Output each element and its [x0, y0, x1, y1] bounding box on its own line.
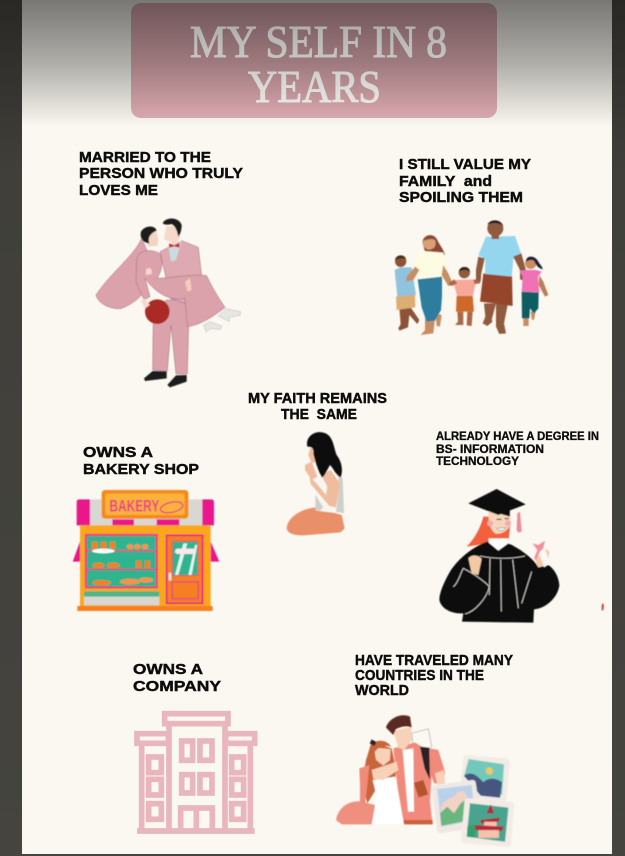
- heading: faith: THE SAME: [281, 406, 357, 423]
- heading: company: [133, 661, 221, 695]
- mother: [406, 235, 453, 335]
- heading: travel: COUNTRIES IN THE: [355, 667, 484, 684]
- illustration: family walking: [395, 220, 548, 335]
- boy: [395, 255, 419, 331]
- door: [167, 535, 203, 603]
- heading: travel: HAVE TRAVELED MANY: [355, 652, 513, 669]
- heading: degree: ALREADY HAVE A DEGREE IN: [436, 431, 599, 443]
- heading: bakery: BAKERY SHOP: [83, 461, 199, 478]
- illustration: bakery shop: [73, 490, 219, 611]
- heading: married: MARRIED TO THE: [79, 149, 211, 166]
- illustration: traveling couple and photos: [336, 715, 514, 847]
- heading: faith: MY FAITH REMAINS: [248, 390, 387, 407]
- awning: [73, 499, 219, 562]
- heading: family: I STILL VALUE MY: [399, 156, 531, 173]
- title banner: YEARS: [248, 61, 381, 112]
- illustration: bride and groom: [96, 219, 241, 387]
- heading: married: [79, 149, 243, 199]
- illustration: graduate: [439, 489, 604, 623]
- heading: degree: TECHNOLOGY: [436, 456, 519, 468]
- planter: [84, 591, 159, 605]
- heading: family: [399, 156, 531, 206]
- window: [86, 535, 157, 587]
- man: [386, 715, 445, 824]
- toddler: [448, 267, 481, 326]
- heading: married: LOVES ME: [79, 182, 158, 199]
- icon: company building: [137, 714, 255, 832]
- title banner: [22, 0, 612, 127]
- heading: bakery: [83, 444, 199, 478]
- heading: degree: BS- INFORMATION: [436, 444, 544, 456]
- photo: lake and sun: [460, 755, 510, 802]
- title banner: MY SELF IN 8: [190, 16, 447, 67]
- heading: family: SPOILING THEM: [399, 189, 523, 206]
- heading: degree: [436, 431, 599, 468]
- illustration: woman praying: [287, 432, 345, 535]
- heading: company: OWNS A: [133, 661, 203, 678]
- girl: [519, 257, 548, 326]
- shop wall: [80, 525, 211, 607]
- sign: [102, 490, 188, 519]
- heading: faith: [248, 390, 387, 423]
- woman: [336, 739, 404, 824]
- backpack: [412, 729, 432, 750]
- heading: company: COMPANY: [133, 678, 221, 695]
- heading: married: PERSON WHO TRULY: [79, 165, 243, 182]
- sign: BAKERY: [109, 497, 159, 516]
- heading: bakery: OWNS A: [83, 444, 153, 461]
- heading: travel: WORLD: [355, 682, 409, 699]
- photo: pagoda: [461, 798, 514, 847]
- heading: travel: [355, 652, 513, 699]
- heading: family: FAMILY and: [399, 173, 492, 190]
- father: [476, 220, 527, 334]
- photo: mountains: [431, 779, 482, 834]
